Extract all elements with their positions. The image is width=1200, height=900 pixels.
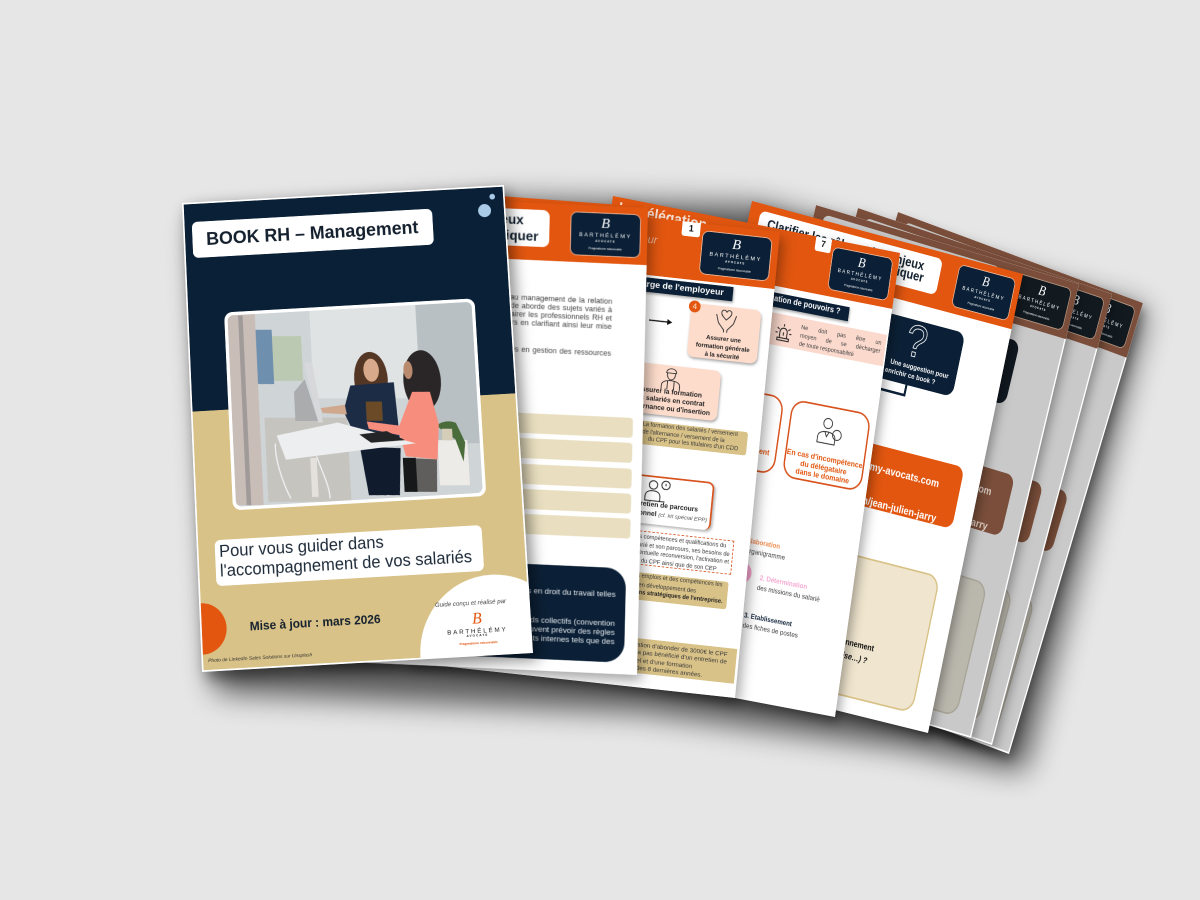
obligation 4 box	[687, 303, 762, 364]
page title: du management à expliquer	[336, 221, 539, 244]
logo: BARTHÉLÉMY	[962, 285, 1005, 302]
feedback box: (entreprise…) ?	[815, 644, 868, 666]
label: à la sécurité	[704, 350, 740, 361]
dark information box: collective…) peuvent prévoir des règles	[475, 622, 615, 638]
page title: de la relation à expliquer	[763, 229, 925, 286]
section heading bar: À la charge de l'employeur	[613, 275, 724, 298]
pink marker	[733, 561, 753, 584]
case label: du délégataire	[800, 459, 847, 477]
question box tail	[851, 371, 907, 397]
logo: BARTHÉLÉMY	[709, 251, 762, 263]
logo: AVOCATS	[974, 295, 991, 303]
note 1 text: du CPF pour les titulaires d'un CDD	[648, 436, 738, 452]
title	[192, 209, 434, 258]
intro paragraph 2	[514, 347, 612, 356]
dashed callout: l'utilisation du CPF ainsi que de son CEP	[613, 555, 717, 572]
page: back sheet 2: AVOCATS	[1063, 313, 1079, 321]
note 1 text: de l'alternance / versement de la	[642, 429, 725, 444]
page: contact and suggestions	[653, 201, 1023, 733]
warning box	[768, 312, 887, 366]
logo: Pragmatisme raisonnable	[844, 283, 873, 292]
page: back sheet 1: BARTHÉLÉMY	[1018, 294, 1061, 312]
page: back sheet 1: B	[1037, 282, 1047, 299]
logo: AVOCATS	[725, 260, 745, 265]
contact box: contact@barthelemy-avocats.com	[794, 440, 940, 490]
dashed callout: éventuelle reconversion, l'activation et	[633, 549, 729, 565]
page: back sheet 3: BARTHÉLÉMY	[1084, 310, 1124, 330]
intro paragraph 1	[511, 295, 612, 330]
warning text: moyen de se décharger	[800, 332, 881, 355]
page: back sheet 3	[764, 212, 1143, 754]
page title: Les principes et les enjeux	[336, 205, 524, 228]
page: formation à la charge de l'employeur	[405, 195, 780, 698]
dashed callout: Les compétences et qualifications du	[633, 533, 727, 549]
page: back sheet 2: Pragmatisme raisonnable	[1056, 318, 1082, 330]
question box: enrichir ce book ?	[884, 365, 936, 386]
dashed callout: salarié et son parcours, ses besoins de	[631, 541, 730, 557]
icon: worker	[660, 368, 680, 391]
intro paragraph 1: Ce guide dédié au management de la relation	[455, 290, 612, 306]
subtitle: l'accompagnement de vos salariés	[220, 548, 473, 581]
logo: B	[732, 236, 742, 253]
page: cover	[182, 185, 533, 672]
icon: interview	[644, 480, 671, 503]
title: BOOK RH – Management	[206, 217, 419, 249]
logo: AVOCATS	[595, 239, 615, 244]
label: d'alternance ou d'insertion	[625, 400, 710, 417]
warning text: de toute responsabilité	[798, 340, 854, 358]
logo: B	[981, 273, 991, 290]
page title: Clarifier les rôles et les enjeux	[766, 218, 925, 274]
label	[625, 385, 710, 417]
step 3: des fiches de postes	[742, 621, 798, 639]
case label: dans le domaine	[795, 467, 850, 486]
dark information box: et les documents internes tels que des	[478, 631, 615, 647]
page: back sheet 1	[708, 205, 1079, 738]
label line 2: professionnel (cf. kit spécial EPP)	[613, 506, 707, 524]
step 1: de l'organigramme	[735, 544, 786, 562]
page number	[814, 236, 832, 253]
gold note 3: au cours des 8 dernières années.	[610, 661, 703, 679]
logo: Pragmatisme raisonnable	[718, 267, 751, 274]
intro paragraph 2: dans un cadre épanouissant.	[405, 348, 504, 361]
page: back sheet 3: B	[1102, 299, 1113, 317]
dark information box: Les règles applicables en droit du travail telles	[452, 583, 616, 599]
photo credit: Photo de LinkedIn Sales Solutions sur Unsplash	[208, 653, 312, 664]
page number	[681, 221, 701, 238]
page title: La délégation	[617, 200, 708, 235]
intro paragraph 1: afin d'éclairer les professionnels RH et	[480, 308, 612, 322]
icon: alert beacon	[776, 324, 792, 343]
logo	[570, 211, 641, 258]
step 3: 3. Etablissement	[744, 611, 792, 628]
arrow	[649, 319, 672, 325]
step 2: des missions du salarié	[756, 583, 820, 603]
page: back sheet 1: linkedin.com/in/jean-julien-jarry	[858, 482, 989, 532]
page: back sheet 3: AVOCATS	[1094, 321, 1110, 330]
note 1 text	[642, 421, 738, 452]
page: introduction	[305, 193, 648, 675]
gold note 2	[586, 567, 729, 609]
label: formation générale	[696, 340, 750, 354]
header band	[442, 195, 780, 289]
obligation 2 box	[618, 360, 721, 421]
badge 4	[688, 300, 701, 313]
logo	[827, 247, 893, 301]
gold note 1	[605, 417, 748, 456]
navy upper band	[184, 187, 515, 412]
step 1	[735, 534, 786, 562]
label: L'entretien de parcours	[624, 498, 698, 513]
logo: Pragmatisme raisonnable	[588, 247, 622, 251]
label: Assurer la formation	[637, 385, 702, 399]
logo: BARTHÉLÉMY	[837, 268, 883, 282]
gold note 2: plus en développement des	[626, 581, 696, 594]
question box	[840, 303, 965, 397]
decorative blue dots	[478, 194, 495, 218]
page: back sheet 3: Pragmatisme raisonnable	[1088, 327, 1113, 339]
tagline: Pragmatisme raisonnable	[459, 640, 498, 646]
case label	[786, 447, 863, 486]
header band	[505, 201, 648, 266]
credit line: Guide conçu et réalisé par	[435, 597, 506, 609]
intro paragraph 1: de travail, ce guide aborde des sujets variés à	[454, 298, 612, 314]
intro paragraph 2: ainsi que les équipes en gestion des ressources	[446, 342, 611, 358]
logo	[699, 230, 773, 282]
subtitle: Pour vous guider dans	[219, 533, 384, 561]
page number: 7	[820, 239, 826, 250]
summary rows	[518, 412, 634, 539]
case label: En cas d'incompétence	[786, 447, 863, 471]
firm name: BARTHÉLÉMY	[447, 625, 508, 636]
step 2	[756, 573, 820, 603]
section heading bar	[565, 269, 734, 301]
gold note 2: orientations stratégiques de l'entreprise.	[612, 587, 723, 605]
feedback box: de fonctionnement	[812, 630, 875, 654]
left outlined case box: précis)	[707, 446, 731, 460]
gold note 3: Obligation d'abonder de 3000€ le CPF	[622, 639, 728, 658]
left outlined case box: suffisamment	[724, 440, 770, 458]
page title	[506, 208, 550, 248]
contact box	[724, 408, 964, 529]
dark information box	[474, 564, 626, 662]
subtitle	[215, 525, 484, 586]
author logo circle	[416, 570, 576, 735]
section heading bar	[645, 267, 850, 321]
logo: AVOCATS	[851, 277, 868, 284]
feedback box	[677, 517, 940, 713]
label: Assurer une	[706, 333, 741, 345]
script B: B	[472, 610, 482, 628]
icon: person	[816, 418, 842, 446]
gold note 3	[571, 631, 737, 684]
page: back sheet 2: BARTHÉLÉMY	[1052, 302, 1093, 321]
logo: Pragmatisme raisonnable	[967, 301, 995, 312]
header band	[605, 196, 900, 309]
step 1: 1. Elaboration	[740, 534, 781, 550]
photo: two colleagues at a standing desk	[224, 298, 486, 510]
contact box: linkedin.com/in/jean-julien-jarry	[802, 478, 937, 525]
step 2: 2. Détermination	[759, 573, 808, 591]
page: back sheet 1: Pragmatisme raisonnable	[1023, 310, 1050, 321]
warning text	[798, 323, 882, 358]
header band	[740, 201, 1023, 329]
page number: 1	[688, 224, 694, 234]
logo: B	[857, 254, 867, 271]
warning text: Ne doit pas être un	[801, 323, 882, 346]
tan lower band	[193, 393, 531, 670]
note 1 text: La formation des salariés / versement	[642, 421, 738, 438]
intro paragraph 1: les managers en clarifiant ainsi leur mise	[472, 316, 612, 331]
gold note 3: professionnel et d'une formation	[604, 653, 693, 670]
gold note 3: s'il n'a pas bénéficié d'un entretien de	[624, 647, 727, 665]
entretien professionnel box	[599, 470, 715, 531]
label	[696, 333, 750, 361]
page: back sheet 2: B	[1071, 291, 1081, 309]
question box: Une suggestion pour	[890, 357, 949, 380]
dashed callout	[586, 525, 734, 575]
gold note 2: Les emplois et des compétences les	[630, 572, 723, 588]
left outlined case box	[694, 382, 785, 475]
page: délégation de pouvoirs	[545, 196, 900, 717]
badge 4: 4	[692, 302, 697, 311]
section heading bar: Quand recourir à la délégation de pouvoirs ?	[687, 277, 841, 316]
icon: caring hands	[716, 310, 737, 333]
logo: BARTHÉLÉMY	[579, 232, 632, 240]
page: back sheet 1: AVOCATS	[1030, 304, 1046, 312]
label: des salariés en contrat	[632, 393, 705, 408]
logo: B	[601, 215, 610, 232]
header subtitle: de l'employeur	[587, 226, 658, 246]
dark information box: Les accords collectifs (convention	[496, 614, 615, 628]
step 3	[742, 611, 798, 639]
right outlined case box	[782, 399, 872, 492]
page title	[753, 210, 943, 295]
update date: Mise à jour : mars 2026	[249, 613, 381, 634]
logo	[951, 264, 1016, 321]
page: back sheet 2	[738, 208, 1112, 745]
firm subtitle: AVOCATS	[466, 633, 488, 638]
decorative orange circle	[176, 602, 228, 656]
page: back sheet 1: contact@barthelemy-avocats.com	[851, 444, 993, 498]
